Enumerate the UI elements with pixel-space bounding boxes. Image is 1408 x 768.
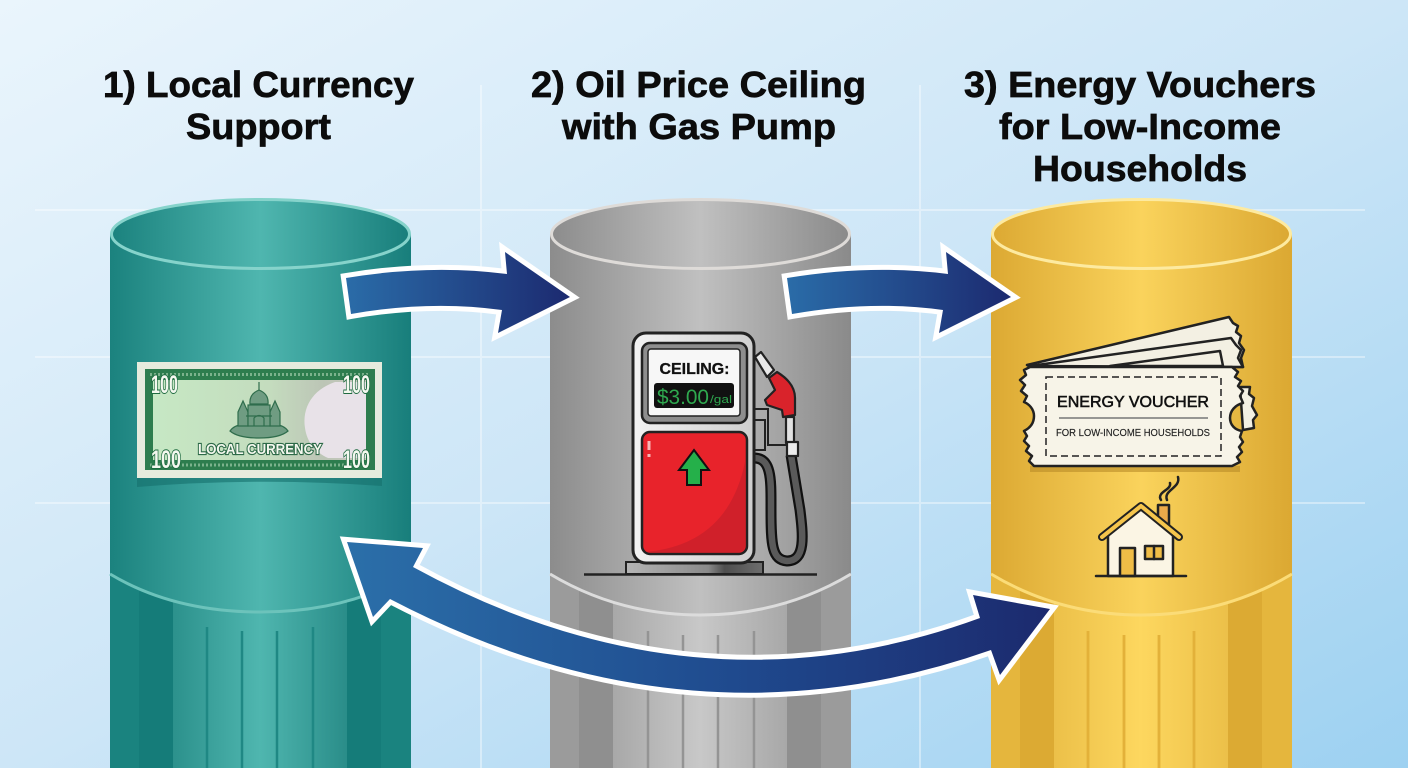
voucher dashed border (1046, 377, 1221, 456)
title: local currency support: Support (186, 106, 331, 147)
title: local currency support: 1) Local Currency (103, 64, 414, 105)
banknote denomination numbers: 100 (151, 371, 178, 399)
icon: gas pump (584, 333, 817, 574)
title: energy vouchers: 3) Energy Vouchers (964, 64, 1316, 105)
pump bracket (754, 409, 787, 450)
pump nozzle (755, 352, 798, 456)
icon: house (1096, 477, 1186, 576)
arrow: oil price ceiling to energy vouchers (787, 252, 1011, 333)
pump hose (754, 455, 802, 561)
banknote denomination numbers (151, 371, 370, 474)
title: local currency support (103, 64, 414, 147)
voucher shadow (1030, 466, 1240, 472)
icon: local currency banknote (137, 362, 382, 487)
front voucher (1020, 367, 1243, 466)
icon: energy vouchers (1020, 317, 1257, 472)
title: oil price ceiling (531, 64, 866, 147)
pump body (633, 333, 754, 563)
title: oil price ceiling: with Gas Pump (561, 106, 836, 147)
banknote denomination numbers: 100 (343, 446, 370, 474)
icon: gas pump: CEILING: (660, 361, 730, 378)
title: oil price ceiling: 2) Oil Price Ceiling (531, 64, 866, 105)
icon: gas pump: $3.00 (657, 386, 709, 409)
pump display (642, 343, 747, 423)
title: energy vouchers: Households (1033, 148, 1247, 189)
cylinder: teal (110, 200, 411, 768)
banknote building (230, 382, 288, 438)
cylinder: gray (550, 200, 851, 768)
banknote label: LOCAL CURRENCY (198, 442, 322, 458)
voucher heading: ENERGY VOUCHER (1057, 394, 1209, 411)
cylinder: gold (991, 200, 1292, 768)
pump red panel (642, 432, 747, 554)
banknote denomination numbers: 100 (343, 371, 370, 399)
title: energy vouchers: for Low-Income (999, 106, 1281, 147)
icon: gas pump: /gal (710, 394, 732, 406)
banknote denomination numbers: 100 (151, 446, 181, 474)
voucher subheading: FOR LOW-INCOME HOUSEHOLDS (1056, 428, 1210, 439)
arrow: two-way link between energy vouchers and local currency (347, 542, 1050, 693)
pump base (584, 573, 817, 576)
house smoke (1160, 477, 1178, 500)
arrow: local currency to oil price ceiling (346, 252, 570, 333)
icon: green up arrow (679, 450, 709, 485)
title: energy vouchers (964, 64, 1316, 189)
back voucher stack (1027, 317, 1257, 430)
